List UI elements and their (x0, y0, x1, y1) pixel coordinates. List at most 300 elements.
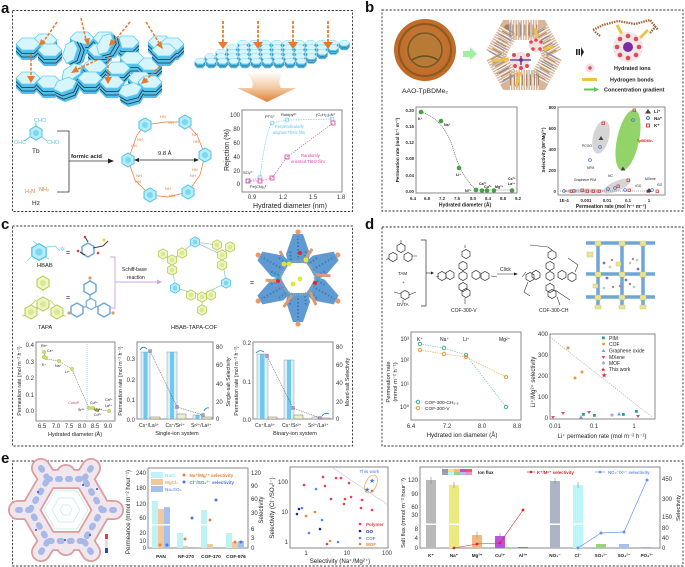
chart: Li/Mg selectivity vs permeation: COF (609, 342, 620, 348)
chart: selectivity vs permeation: 1E-4 (559, 198, 569, 203)
chart: permeance and selectivity: Permeance (mmol m⁻² hour⁻¹) (125, 470, 132, 554)
chart: single-ion system: 80 (216, 345, 223, 351)
chart: selectivity comparison scatter: ★ (364, 486, 370, 494)
chart: rejection vs hydrated diameter (224, 110, 346, 210)
label c: c (1, 216, 9, 233)
chart: selectivity comparison scatter: 1 (285, 540, 289, 546)
molecule: Tb: CHO (34, 118, 47, 124)
chart: permeation rate vs hydrated ion diameter: 8.8 (513, 424, 522, 430)
panel c (1, 216, 352, 446)
chart: selectivity vs permeation: TpBDMe₂ (637, 139, 654, 143)
molecule: pore ring: NH (168, 120, 174, 125)
chart: selectivity vs permeation: NC (608, 174, 613, 178)
arrow: click reaction (497, 267, 518, 276)
chart: permeance and selectivity: Cl⁻/SO₄²⁻ selectivity (190, 480, 235, 485)
chart: rejection vs hydrated diameter: 0.9 (248, 195, 257, 201)
chart: Li/Mg selectivity vs permeation: 0.1 (590, 424, 599, 430)
chart: permeation rate vs hydrated ion diameter: 10⁰ (400, 404, 410, 411)
chart: permeation vs hydrated diameter: 7.5 (65, 424, 74, 430)
molecule: Tb: CHO (47, 140, 60, 146)
chart: permeation vs hydrated diameter: 8.8 (500, 196, 507, 201)
chart: permeation vs hydrated diameter: Ca²⁺ (105, 398, 113, 402)
chart: permeation rate vs hydrated ion diameter: 10¹ (400, 382, 409, 388)
chart: binary-ion system: 40 (336, 381, 343, 387)
chart: selectivity vs permeation: 1 (648, 198, 651, 203)
molecule: Hz: NH₂ (39, 187, 49, 193)
chart: selectivity vs permeation: 0.001 (580, 198, 592, 203)
chart: salt flux and selectivity: NO₃⁻ (549, 553, 561, 558)
molecule: HBAB-TAPA-COF (158, 237, 234, 331)
chart: permeation vs hydrated diameter: 9.0 (104, 424, 113, 430)
chart: single-ion system: Permeation rate (mol m⁻² h⁻¹) (118, 346, 124, 416)
chart: salt flux and selectivity: 150 (662, 515, 673, 521)
chart: binary-ion system: Binary-ion system (273, 431, 317, 437)
chart: single-ion system: 0.1 (127, 398, 136, 404)
chart: salt flux and selectivity: 0 (415, 546, 419, 552)
chart: permeation vs hydrated diameter: 0.12 (405, 140, 415, 145)
chart: permeation rate vs hydrated ion diameter: 8.0 (478, 424, 487, 430)
chart: permeance and selectivity: 90 (251, 484, 258, 490)
chart: permeation vs hydrated diameter: Cs²⁺ (508, 177, 516, 181)
chart: selectivity comparison scatter: Selectivity (Cl⁻/SO₄²⁻) (269, 477, 276, 539)
chart: permeance and selectivity: 10 (139, 539, 147, 545)
chart: rejection vs hydrated diameter: Perpendicularly (275, 124, 305, 129)
chart: permeance and selectivity: 240 (136, 471, 147, 477)
chart: rejection vs hydrated diameter: 20 (233, 169, 241, 175)
illustration: perpendicularly aligned film (195, 40, 350, 68)
chart: single-ion system (118, 342, 232, 437)
chart: selectivity vs permeation: 600 (549, 126, 557, 131)
chart: permeation vs hydrated diameter: Permeation rate (mol h⁻¹ m⁻²) (395, 117, 400, 182)
chart: permeance and selectivity: 0 (143, 546, 147, 552)
panel d (365, 216, 683, 446)
AAO coin photo: AAO-TpBDMe₂ (402, 88, 448, 95)
arrow: click reaction: Click (500, 267, 511, 273)
molecule: HBAB: ✲ (60, 246, 65, 253)
chart: permeation vs hydrated diameter: Ni²⁺ (465, 189, 472, 193)
chart: permeation rate vs hydrated ion diameter: Na⁺ (440, 337, 449, 343)
chart: binary-ion system: 0.1 (243, 380, 252, 386)
chart: single-ion system: Single-salt Selectivity (226, 357, 232, 407)
molecule: pore ring: HN (160, 114, 166, 119)
arrows: ion flux aligned film (218, 21, 333, 49)
chart: permeation rate vs hydrated ion diameter (386, 332, 522, 439)
chart: selectivity comparison scatter: ★ (369, 477, 375, 485)
chart: permeation vs hydrated diameter: Mg²⁺ (94, 408, 102, 412)
chart: selectivity vs permeation: 0.1 (625, 198, 632, 203)
chart: single-ion system: 0.0 (127, 418, 136, 424)
chart: permeation vs hydrated diameter: 0.16 (405, 124, 415, 129)
panel a (1, 0, 352, 212)
chart: Li/Mg selectivity vs permeation: ★ (600, 366, 606, 374)
chart: permeation vs hydrated diameter: 6.4 (410, 196, 417, 201)
chart: permeance and selectivity: Na⁺/Mg²⁺ selectivity (190, 473, 234, 478)
chart: permeation vs hydrated diameter: 0.08 (405, 156, 415, 161)
molecules: TAM and DVTA: TAM (398, 271, 407, 276)
chart: permeation vs hydrated diameter: La³⁺ (105, 404, 112, 408)
chart: permeation vs hydrated diameter: Co²⁺ (94, 413, 102, 417)
chart: salt flux and selectivity: K⁺/Mⁿ⁺ selectivity (537, 470, 574, 475)
chart: selectivity vs permeation: PCGO (582, 144, 592, 148)
chart: Li/Mg selectivity vs permeation: MXene (609, 355, 625, 361)
chart: rejection vs hydrated diameter: SO₄²⁻ (243, 170, 254, 175)
chart: selectivity vs permeation: Graphene PIM (574, 178, 596, 182)
chart: binary-ion system: 0 (336, 417, 340, 423)
chart: Li/Mg selectivity vs permeation: PIM (609, 336, 618, 342)
chart: selectivity vs permeation (541, 105, 665, 210)
chart: permeation vs hydrated diameter: 8.0 (470, 196, 477, 201)
chart: permeation vs hydrated diameter: Rb⁺ (41, 344, 48, 348)
chart: selectivity vs permeation: Li⁺ (654, 109, 661, 114)
chart: permeation vs hydrated diameter: Hydrated diameter (Å) (48, 431, 102, 438)
legend: model key: Hydrated ions (614, 66, 651, 72)
chart: permeation vs hydrated diameter: 0.4 (26, 343, 35, 349)
chart: single-ion system: Single-ion system (155, 431, 199, 437)
chart: Li/Mg selectivity vs permeation: 200 (538, 374, 549, 380)
chart: permeation vs hydrated diameter: Cs⁺ (47, 349, 53, 353)
chart: Li/Mg selectivity vs permeation: ★ (601, 372, 607, 380)
chart: salt flux and selectivity: SO₃²⁻ (595, 553, 608, 558)
molecule: Tb (14, 118, 60, 155)
chart: permeation vs hydrated diameter: Mg²⁺ (495, 185, 503, 189)
chart: selectivity vs permeation: Selectivity (M⁺/Mg²⁺) (541, 127, 546, 173)
chart: selectivity vs permeation: 0.01 (603, 198, 612, 203)
molecule: Tb: Tb (32, 148, 40, 155)
chart: permeation vs hydrated diameter: 6.5 (38, 424, 47, 430)
reaction arrow: Schiff-base (110, 257, 162, 308)
chart: salt flux and selectivity: 90 (411, 492, 419, 498)
chart: salt flux and selectivity: 0 (662, 546, 666, 552)
chart: selectivity vs permeation: Permeation rate (mol h⁻¹ m⁻²) (576, 204, 646, 210)
chart: permeation vs hydrated diameter: 6.8 (424, 196, 431, 201)
chart: permeation rate vs hydrated ion diameter: (mmol m⁻² h⁻¹) (393, 362, 399, 402)
chart: permeance and selectivity: MgCl₂ (165, 480, 178, 485)
chart: permeation rate vs hydrated ion diameter: 10³ (400, 337, 409, 343)
chart: selectivity vs permeation: GO (657, 183, 663, 187)
chart: rejection vs hydrated diameter: 0 (237, 182, 241, 188)
molecule: pore ring: HN (131, 143, 137, 148)
chart: Li/Mg selectivity vs permeation: 400 (538, 332, 549, 338)
chart: Li/Mg selectivity vs permeation: This work (609, 367, 631, 373)
chart: salt flux and selectivity: Mg²⁺ (472, 553, 483, 558)
chart: salt flux and selectivity: Na⁺ (450, 553, 459, 558)
chart: permeance and selectivity: PAN (156, 554, 166, 560)
chart: permeation vs hydrated diameter: K⁺ (418, 117, 423, 121)
arrow: to COF-300-V (426, 272, 434, 274)
molecule: COF-300-V (436, 245, 497, 314)
chart: permeation vs hydrated diameter: Li⁺ (456, 173, 461, 177)
chart: Li/Mg selectivity vs permeation: Li⁺/Mg²⁺ selectivity (530, 357, 537, 407)
molecule: pore ring: NH (192, 132, 198, 137)
chart: binary-ion system (234, 341, 351, 437)
chart: permeation vs hydrated diameter: 8.5 (91, 424, 100, 430)
legend: model key (582, 64, 665, 94)
chart: permeation vs hydrated diameter: 0.1 (26, 393, 35, 399)
chart: selectivity vs permeation: MXene (645, 177, 656, 181)
molecule: HBAB-TAPA-COF: HBAB-TAPA-COF (171, 325, 218, 331)
chart: salt flux and selectivity: 40 (662, 536, 669, 542)
chart: permeation vs hydrated diameter: 7.6 (454, 196, 461, 201)
chart: permeance and selectivity: 20 (139, 531, 147, 537)
chart: binary-ion system: Cs⁺/La³⁺ (255, 423, 275, 429)
chart: permeation vs hydrated diameter: La³⁺ (508, 182, 515, 186)
molecule: pore ring: NH (190, 173, 196, 178)
molecule: pore ring: 9.8 Å (158, 150, 172, 157)
reaction arrow: Schiff-base: reaction (127, 275, 145, 281)
chart: permeance and selectivity: 3 (251, 536, 255, 542)
chart: single-ion system: 40 (216, 382, 223, 388)
arrows: ion flux random film (27, 18, 163, 84)
chart: permeation vs hydrated diameter: Ca²⁺ (479, 182, 487, 186)
chart: permeation vs hydrated diameter: Cu²⁺ (90, 401, 98, 405)
chart: selectivity vs permeation: 200 (549, 168, 557, 173)
chart: permeance and selectivity (125, 468, 265, 560)
chart: single-ion system: Sr²⁺/La³⁺ (191, 423, 212, 429)
COF space-filling model (247, 229, 349, 327)
chart: Li/Mg selectivity vs permeation: 0.01 (549, 424, 561, 430)
chart: single-ion system: 60 (216, 363, 223, 369)
molecules: TAM and DVTA (386, 240, 426, 307)
chart: binary-ion system: Permeation rate (mol m⁻² h⁻¹) (234, 346, 240, 416)
chart: selectivity comparison scatter: This work (360, 469, 380, 474)
molecule: HBAB (27, 236, 108, 269)
chart: selectivity vs permeation: K⁺ (654, 123, 660, 128)
chart: permeance and selectivity: NaCl (165, 473, 175, 478)
chart: salt flux and selectivity (401, 467, 682, 558)
legend: model key: Concentration gradient (604, 88, 665, 94)
chart: rejection vs hydrated diameter: Rejection (%) (224, 129, 231, 171)
chart: binary-ion system: Cs⁺/Sr²⁺ (282, 423, 302, 429)
chart: permeation rate vs hydrated ion diameter: 6.4 (407, 424, 416, 430)
chart: permeation vs hydrated diameter: Li⁺ (65, 370, 70, 374)
chart: permeation vs hydrated diameter (17, 342, 115, 438)
chart: binary-ion system: 80 (336, 345, 343, 351)
molecule: COF-300-CH (522, 245, 578, 314)
highlight: comparison ellipses (564, 119, 633, 197)
chart: salt flux and selectivity: 120 (408, 478, 419, 484)
molecule: pore ring: NH (165, 186, 171, 191)
chart: Li/Mg selectivity vs permeation: 0 (545, 416, 549, 422)
chart: selectivity comparison scatter: Selectivity (Na⁺/Mg²⁺) (310, 558, 370, 565)
chart: permeance and selectivity: 6 (251, 527, 255, 533)
legend: model key: Hydrogen bonds (610, 78, 654, 84)
chart: salt flux and selectivity: 80 (662, 526, 669, 532)
chart: selectivity vs permeation: Na⁺ (654, 116, 663, 121)
chart: permeance and selectivity: 0 (251, 546, 255, 552)
chart: permeation vs hydrated diameter: 0.04 (405, 173, 415, 178)
chart: salt flux and selectivity: 30 (411, 513, 419, 519)
chart: permeation rate vs hydrated ion diameter: COF-300-V (425, 406, 450, 412)
label d: d (365, 216, 374, 233)
chart: salt flux and selectivity: 4 (415, 536, 419, 542)
reaction bracket and arrow (57, 131, 114, 192)
chart: permeation vs hydrated diameter: Cutoff (68, 400, 79, 405)
chart: binary-ion system: 20 (336, 400, 343, 406)
chart: selectivity vs permeation: 0 (554, 189, 557, 194)
molecule: COF-300-CH: COF-300-CH (539, 308, 569, 314)
chart: Li/Mg selectivity vs permeation: Li⁺ permeation rate (mol m⁻² h⁻¹) (558, 433, 646, 440)
chart: salt flux and selectivity: K⁺ (428, 553, 434, 558)
chart: permeance and selectivity: 180 (136, 486, 147, 492)
chart: salt flux and selectivity: 60 (411, 505, 419, 511)
chart: selectivity comparison scatter: GO (366, 529, 374, 534)
chart: selectivity comparison scatter: COF (366, 536, 376, 541)
chart: binary-ion system: 0.0 (243, 418, 252, 424)
chart: salt flux and selectivity: Salt flux (mmol m⁻² hour⁻¹) (401, 478, 407, 548)
chart: permeation rate vs hydrated ion diameter: Permeation rate (386, 361, 392, 403)
molecule: Hz: Hz (32, 200, 40, 207)
chart: rejection vs hydrated diameter: 1.2 (279, 195, 288, 201)
chart: salt flux and selectivity: 300 (662, 497, 673, 503)
chart: selectivity vs permeation: 400 (549, 147, 557, 152)
chart: salt flux and selectivity: PO₄³⁻ (641, 553, 654, 558)
chart: permeation vs hydrated diameter: 0.3 (26, 360, 35, 366)
chart: permeation vs hydrated diameter: 7.0 (52, 424, 61, 430)
molecule: COF-300-V: COF-300-V (451, 308, 477, 314)
chart: rejection vs hydrated diameter: aligned TbHz film (273, 130, 306, 135)
chart: selectivity comparison scatter: 100 (382, 551, 393, 557)
chart: selectivity comparison scatter (269, 467, 393, 565)
chart: permeation vs hydrated diameter: Hydrated diameter (Å) (439, 202, 491, 208)
chart: rejection vs hydrated diameter: 100 (230, 113, 241, 119)
chart: rejection vs hydrated diameter: (C₆H₁₃)₄N⁺ (316, 112, 336, 117)
chart: permeation vs hydrated diameter: Permeation rate (mol m⁻² h⁻¹) (17, 346, 23, 416)
chart: permeation rate vs hydrated ion diameter: COF-300-CH₀.₆ (425, 400, 459, 406)
chart: salt flux and selectivity: Ion flux (478, 470, 494, 475)
chart: permeance and selectivity: Na₂SO₄ (165, 487, 182, 492)
panel e (1, 450, 683, 566)
chart: rejection vs hydrated diameter: Rubipy³⁺ (281, 112, 297, 117)
chart: permeation vs hydrated diameter: 0.00 (405, 189, 415, 194)
molecule: pore ring: HN (169, 193, 175, 198)
chart: permeation vs hydrated diameter: 8.4 (485, 196, 492, 201)
chart: permeation vs hydrated diameter: 0.20 (405, 108, 415, 113)
chart: single-ion system: Cs⁺/Sr²⁺ (166, 423, 185, 429)
COF pore model (491, 28, 553, 87)
molecules: TAM and DVTA: + (402, 280, 405, 285)
chart: permeation rate vs hydrated ion diameter: K⁺ (417, 337, 423, 343)
chart: salt flux and selectivity: NO₃⁻/Xⁿ⁻ selectivity (608, 470, 650, 475)
chart: salt flux and selectivity: 8 (415, 527, 419, 533)
chart: permeation vs hydrated diameter: 0.0 (26, 409, 35, 415)
lattice schematic (586, 241, 655, 309)
chart: Li/Mg selectivity vs permeation: 300 (538, 353, 549, 359)
molecule: TAPA: = (66, 295, 70, 302)
reaction arrow: Schiff-base: Schiff-base (122, 267, 147, 273)
reaction bracket and arrow: formic acid (71, 154, 102, 160)
electrostatic potential pore model (18, 468, 114, 553)
chart: rejection vs hydrated diameter: 60 (233, 141, 241, 147)
chart: salt flux and selectivity: Cl⁻ (574, 553, 582, 558)
chart: permeation rate vs hydrated ion diameter: Hydrated ion diameter (Å) (427, 432, 497, 439)
molecule: HBAB: HBAB (37, 263, 53, 269)
molecule: pore ring: NH (137, 137, 143, 142)
chart: permeation vs hydrated diameter: Na⁺ (444, 123, 451, 127)
chart: selectivity comparison scatter: 100 (278, 480, 289, 486)
chart: salt flux and selectivity: Cu²⁺ (495, 553, 506, 558)
chart: permeation vs hydrated diameter: 0.2 (26, 376, 35, 382)
molecule: TAPA (22, 265, 115, 331)
chart: selectivity comparison scatter: MOF (366, 542, 376, 547)
chart: permeance and selectivity: COF-170 (201, 554, 221, 560)
label e: e (1, 450, 9, 467)
label a: a (1, 0, 10, 17)
illustration: randomly oriented film (16, 31, 184, 109)
hydrated ion model (593, 20, 658, 62)
chart: selectivity vs permeation: NFM (587, 166, 595, 170)
chart: Li/Mg selectivity vs permeation: 100 (538, 395, 549, 401)
chart: Li/Mg selectivity vs permeation: MOF (609, 361, 620, 367)
molecule: HBAB: = (66, 250, 70, 257)
chart: selectivity comparison scatter: 1 (304, 551, 308, 557)
chart: permeance and selectivity: 60 (139, 516, 147, 522)
chart: single-ion system: Cs⁺/La³⁺ (139, 423, 159, 429)
chart: binary-ion system: 0.2 (243, 341, 252, 347)
chart: permeation rate vs hydrated ion diameter: Mg²⁺ (499, 337, 511, 343)
green arrow (463, 47, 477, 60)
chart: permeance and selectivity: 30 (251, 511, 258, 517)
chart: single-ion system: 0.3 (127, 357, 136, 363)
chart: rejection vs hydrated diameter: Randomly (301, 153, 321, 158)
chart: permeation rate vs hydrated ion diameter: 7.2 (443, 424, 452, 430)
chart: rejection vs hydrated diameter: 40 (233, 155, 241, 161)
chart: permeation vs hydrated diameter: Cu²⁺ (484, 185, 492, 189)
chart: selectivity vs permeation: 800 (549, 105, 557, 110)
chart: permeation vs hydrated diameter: Na⁺ (55, 364, 62, 368)
chart: selectivity vs permeation: rGO (635, 184, 642, 188)
molecule: TAPA: TAPA (38, 325, 52, 331)
chart: single-ion system: 20 (216, 400, 223, 406)
molecule: pore ring (122, 114, 211, 202)
AAO coin photo (394, 19, 456, 95)
chart: salt flux and selectivity: Al³⁺ (519, 553, 528, 558)
chart: permeation vs hydrated diameter: Sr²⁺ (78, 408, 85, 412)
molecule: pore ring: NH (136, 173, 142, 178)
chart: single-ion system: 0 (216, 417, 220, 423)
chart: Li/Mg selectivity vs permeation: 1 (632, 424, 636, 430)
chart: permeation vs hydrated diameter: 7.2 (439, 196, 446, 201)
chart: rejection vs hydrated diameter: 80 (233, 127, 241, 133)
molecule: pore ring: HN (193, 139, 199, 144)
chart: rejection vs hydrated diameter: oriented TbHz film (291, 159, 325, 164)
chart: Li/Mg selectivity vs permeation (530, 332, 655, 440)
chart: selectivity comparison scatter: 10 (344, 551, 351, 557)
chart: rejection vs hydrated diameter: Hydrated diameter (nm) (253, 203, 327, 210)
chart: salt flux and selectivity: SO₄²⁻ (618, 553, 631, 558)
chart: salt flux and selectivity: 450 (662, 477, 673, 483)
molecule: Hz (25, 187, 49, 207)
chart: permeance and selectivity: NF-270 (178, 554, 194, 560)
molecule: Tb: OHC (14, 140, 26, 146)
chart: permeance and selectivity: 120 (136, 502, 147, 508)
chart: permeance and selectivity: COF-976 (226, 554, 246, 560)
molecules: TAM and DVTA: DVTA (397, 302, 409, 307)
chart: permeation rate vs hydrated ion diameter: 10² (400, 358, 409, 364)
chart: Li/Mg selectivity vs permeation: Graphene oxide (609, 348, 645, 354)
chart: rejection vs hydrated diameter: PTS⁺ (265, 114, 275, 119)
chart: binary-ion system: 60 (336, 363, 343, 369)
chart: binary-ion system: Mixed-salt Selectivity (345, 357, 351, 406)
chart: selectivity comparison scatter: Polymer (366, 522, 384, 527)
chart: salt flux and selectivity: Selectivity (676, 495, 682, 521)
chart: permeation vs hydrated diameter: 9.2 (515, 196, 522, 201)
chart: permeation rate vs hydrated ion diameter: Li⁺ (463, 337, 470, 343)
chart: selectivity comparison scatter: 10 (281, 510, 289, 516)
chart: rejection vs hydrated diameter: Fe(CN)₆³⁻ (250, 184, 268, 189)
chart: permeation vs hydrated diameter (395, 107, 522, 208)
chart: binary-ion system: Sr²⁺/La³⁺ (308, 423, 329, 429)
chart: single-ion system: 0.2 (127, 378, 136, 384)
